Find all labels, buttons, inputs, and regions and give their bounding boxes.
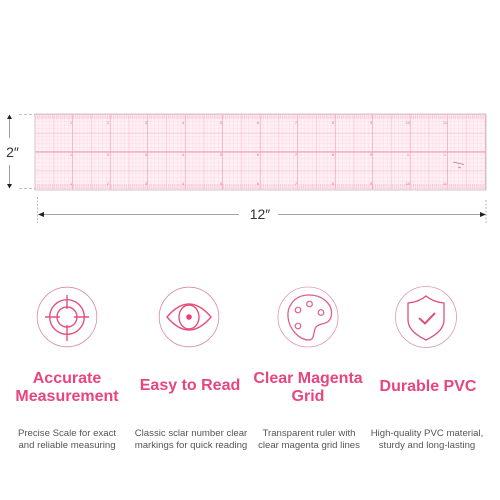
text: accurate measurement description: and reliable measuring xyxy=(18,440,116,451)
ruler numbers: 1 xyxy=(70,181,73,186)
dimension: height 2 inches: 2″ xyxy=(6,144,19,160)
ruler numbers: 6 xyxy=(257,152,260,157)
ruler numbers: 4 xyxy=(182,120,185,125)
ruler numbers: 7 xyxy=(295,120,298,125)
ruler numbers: 7 xyxy=(295,181,298,186)
text: easy to read description: Classic sclar number clear xyxy=(135,428,247,439)
ruler numbers xyxy=(70,120,448,186)
ruler numbers: 1 xyxy=(407,152,410,157)
dimension: length 12 inches xyxy=(38,197,486,223)
ruler numbers: 2 xyxy=(107,120,110,125)
ruler numbers: 1 xyxy=(70,152,73,157)
ruler numbers: 10 xyxy=(406,120,411,125)
text: clear magenta grid description: Transparent ruler with xyxy=(263,428,355,439)
ruler numbers: 11 xyxy=(443,120,448,125)
heading: easy to read: Easy to Read xyxy=(140,377,240,394)
text: clear magenta grid description: clear magenta grid lines xyxy=(258,440,360,451)
ruler numbers: 9 xyxy=(370,152,373,157)
ruler numbers: 5 xyxy=(220,152,223,157)
ruler numbers: 5 xyxy=(220,120,223,125)
dimension: height 2 inches xyxy=(6,114,35,188)
ruler numbers: 11 xyxy=(443,181,448,186)
heading: accurate measurement: Accurate xyxy=(33,370,101,387)
ruler numbers: 6 xyxy=(257,181,260,186)
ruler numbers: 8 xyxy=(332,120,335,125)
text: accurate measurement description: Precise Scale for exact xyxy=(18,428,116,439)
ruler numbers: 7 xyxy=(295,152,298,157)
ruler numbers: 5 xyxy=(220,181,223,186)
text: accurate measurement description xyxy=(18,428,116,451)
ruler numbers: 1 xyxy=(444,152,447,157)
heading: accurate measurement xyxy=(15,370,119,404)
ruler numbers: 9 xyxy=(370,120,373,125)
ruler numbers: 9 xyxy=(370,181,373,186)
text: durable PVC description: High-quality PVC material, xyxy=(371,428,483,439)
text: clear magenta grid description xyxy=(258,428,360,451)
heading: durable PVC: Durable PVC xyxy=(380,378,476,395)
heading: clear magenta grid: Grid xyxy=(292,388,324,404)
ruler numbers: 10 xyxy=(406,181,411,186)
text: easy to read description xyxy=(135,428,248,451)
icon: target xyxy=(37,287,97,347)
heading: accurate measurement: Measurement xyxy=(15,388,119,404)
text: easy to read description: markings for quick reading xyxy=(135,440,247,451)
ruler xyxy=(35,114,486,190)
ruler numbers: 4 xyxy=(182,152,185,157)
ruler numbers: 8 xyxy=(332,152,335,157)
ruler numbers: 8 xyxy=(332,181,335,186)
ruler numbers: 6 xyxy=(257,120,260,125)
ruler numbers: 4 xyxy=(182,181,185,186)
text: durable PVC description: sturdy and long-lasting xyxy=(379,440,475,451)
ruler numbers: 3 xyxy=(145,120,148,125)
ruler numbers: 3 xyxy=(145,152,148,157)
icon: shield xyxy=(396,286,456,348)
heading: clear magenta grid: Clear Magenta xyxy=(253,370,363,387)
icon: eye xyxy=(159,287,219,347)
icon: palette xyxy=(278,287,338,347)
ruler numbers: 2 xyxy=(107,152,110,157)
ruler numbers: 3 xyxy=(145,181,148,186)
dimension: length 12 inches: 12″ xyxy=(250,206,270,222)
ruler numbers: 1 xyxy=(70,120,73,125)
text: durable PVC description xyxy=(371,428,483,451)
heading: clear magenta grid xyxy=(253,370,363,404)
ruler numbers: 2 xyxy=(107,181,110,186)
